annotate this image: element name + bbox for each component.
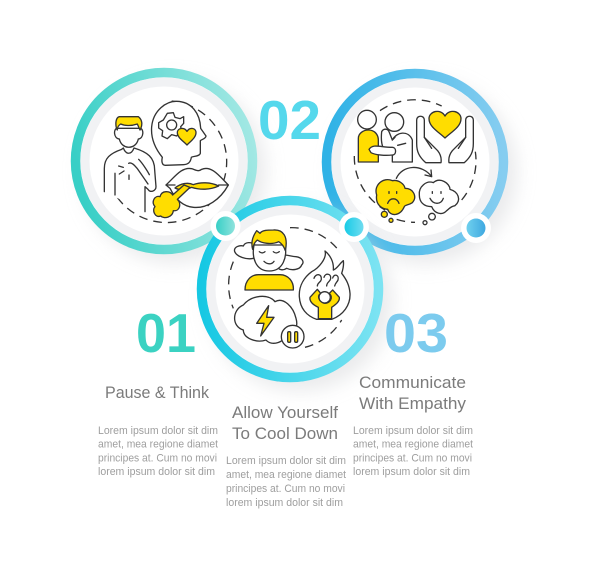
icon: embrace, heart in hands, mood clouds (354, 100, 476, 225)
icon: calm person, cloud, fire (229, 228, 350, 348)
number 01: 01 (136, 302, 196, 364)
heading: communicate with empathy (359, 373, 467, 413)
text block: empathy description: amet, mea regione diamet (353, 438, 473, 450)
arrow (396, 167, 432, 178)
clouds by head (234, 243, 255, 259)
text block: cool down description: Lorem ipsum dolor sit dim (226, 455, 346, 467)
people (358, 110, 376, 129)
sad cloud (376, 180, 415, 215)
panel: circle 1 pause and think (76, 72, 266, 263)
text block: cool down description: principes at. Cum no movi (226, 483, 345, 495)
number 03: 03 (384, 302, 448, 364)
heading: allow yourself to cool down (232, 403, 338, 443)
head (253, 245, 286, 271)
text block: empathy description (353, 425, 473, 478)
fire (299, 251, 350, 319)
torso (245, 275, 293, 290)
text block: pause and think description (98, 425, 218, 478)
panel: circle 2 allow yourself to cool down (202, 200, 392, 391)
text block: empathy description: principes at. Cum no movi (353, 452, 472, 464)
text block: cool down description (226, 455, 346, 509)
panel: circle 3 communicate with empathy (326, 74, 517, 264)
head (152, 101, 206, 165)
hands (417, 116, 441, 163)
storm cloud (235, 296, 297, 343)
text block: empathy description: lorem ipsum dolor sit dim (353, 466, 470, 478)
text block: empathy description: Lorem ipsum dolor sit dim (353, 425, 473, 437)
connector dot: circle 3 (461, 213, 491, 243)
lips (166, 168, 228, 207)
heading: allow yourself to cool down: Allow Yourself (232, 403, 338, 422)
text block: cool down description: amet, mea regione diamet (226, 469, 346, 481)
connector dot: circles 1 and 2 (210, 211, 240, 241)
heading: allow yourself to cool down: To Cool Down (232, 424, 338, 443)
connector dot: circles 2 and 3 (339, 212, 369, 242)
heading: communicate with empathy: Communicate (359, 373, 466, 392)
happy cloud (419, 180, 459, 214)
text block: pause and think description: Lorem ipsum dolor sit dim (98, 425, 218, 437)
text block: pause and think description: principes at. Cum no movi (98, 452, 217, 464)
person (104, 148, 156, 212)
puff (153, 185, 190, 218)
heading: pause and think: Pause & Think (105, 383, 209, 402)
text block: pause and think description: amet, mea regione diamet (98, 438, 218, 450)
icon: person, head with heart, lips (104, 101, 228, 223)
text block: cool down description: lorem ipsum dolor sit dim (226, 497, 343, 509)
text block: pause and think description: lorem ipsum dolor sit dim (98, 466, 215, 478)
heading: communicate with empathy: With Empathy (359, 394, 467, 413)
number 02: 02 (258, 89, 321, 151)
